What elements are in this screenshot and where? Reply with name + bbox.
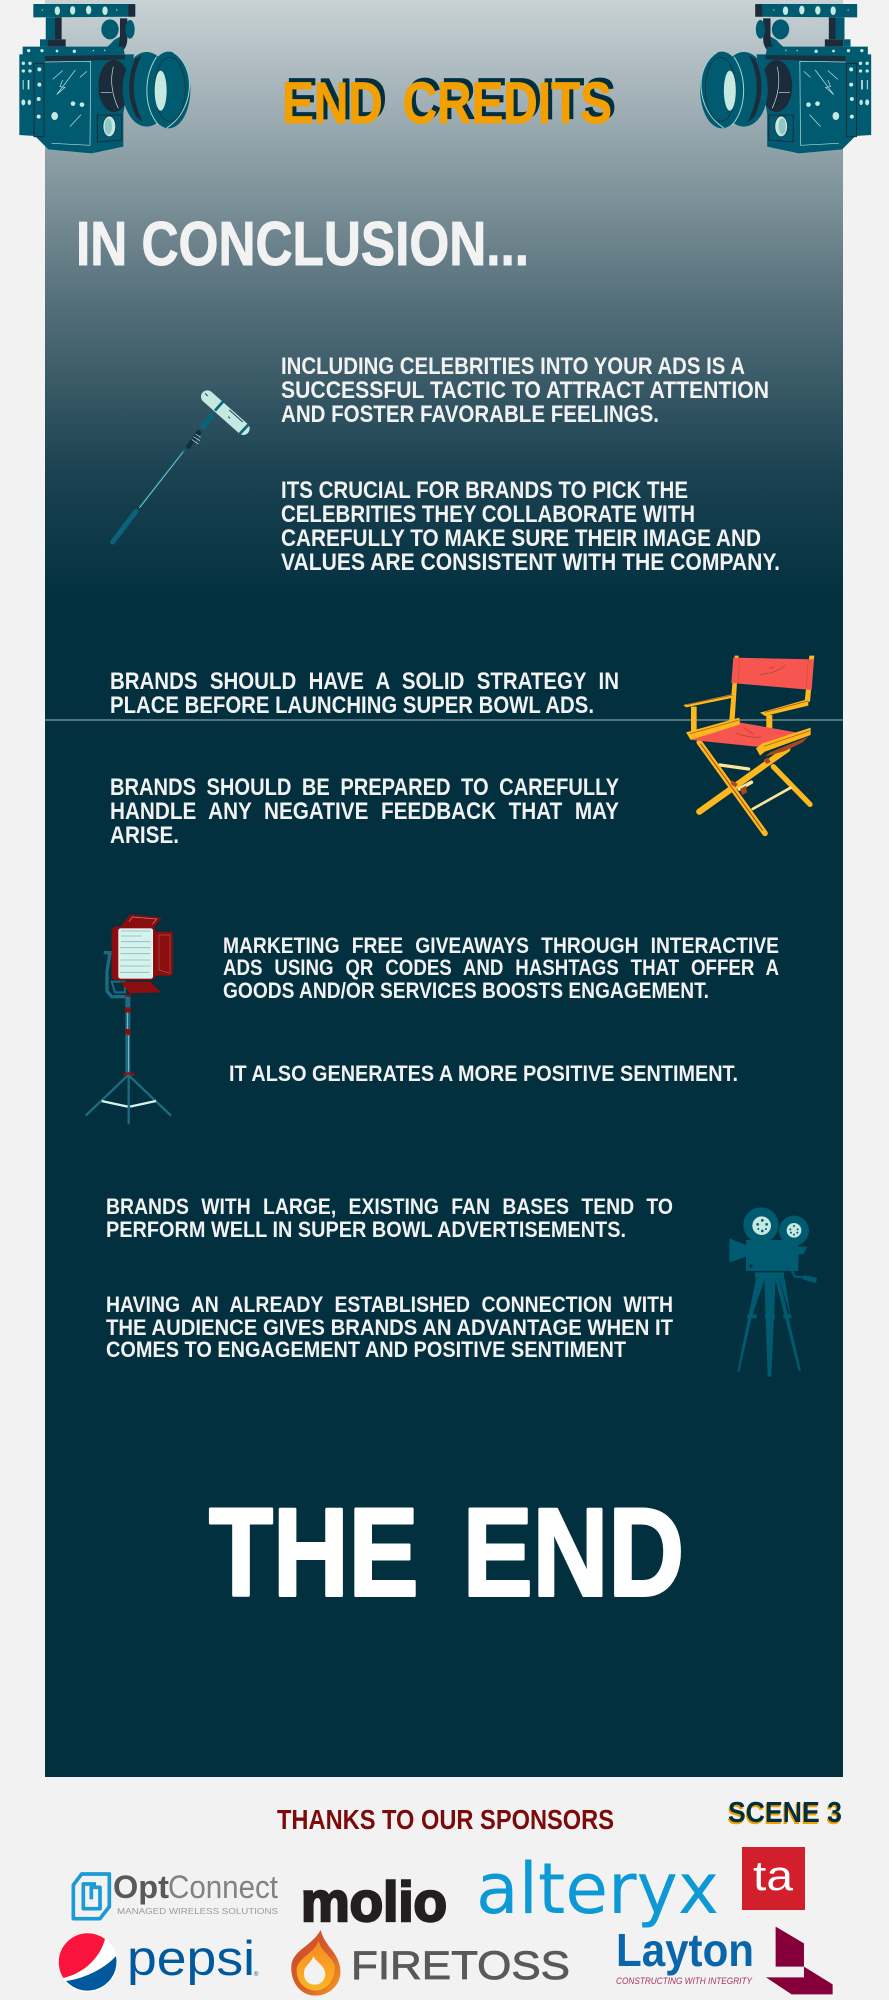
text: strategy takeaways: HANDLE ANY NEGATIVE FEEDBACK THAT MAY: [110, 798, 619, 825]
icon: director chair: [683, 656, 814, 833]
text: fan base takeaways: HAVING AN ALREADY ESTABLISHED CONNECTION WITH: [106, 1292, 673, 1317]
text: strategy takeaways: BRANDS SHOULD HAVE A SOLID STRATEGY IN: [110, 668, 619, 695]
label: scene 3: SCENE 3: [728, 1797, 842, 1829]
icon: right cinema camera: [700, 4, 871, 153]
text: celebrity takeaways: INCLUDING CELEBRITIES INTO YOUR ADS IS A: [281, 353, 745, 380]
icon: studio light on stand: [86, 914, 173, 1124]
icon: boom microphone: [113, 393, 248, 542]
text: strategy takeaways: BRANDS SHOULD BE PREPARED TO CAREFULLY: [110, 774, 619, 801]
logo: pepsi: pepsi: [127, 1932, 255, 1986]
title: end credits: END CREDITS: [282, 71, 612, 136]
logo: ta: [742, 1847, 805, 1910]
logo: optconnect: [73, 1869, 279, 1919]
logo: layton: Layton: [616, 1924, 754, 1976]
text: fan base takeaways: BRANDS WITH LARGE, EXISTING FAN BASES TEND TO: [106, 1194, 673, 1219]
heading: in conclusion: IN CONCLUSION...: [76, 210, 529, 279]
text: giveaway takeaways: IT ALSO GENERATES A MORE POSITIVE SENTIMENT.: [229, 1061, 738, 1086]
text: fan base takeaways: COMES TO ENGAGEMENT AND POSITIVE SENTIMENT: [106, 1337, 626, 1362]
logo: alteryx: alteryx: [476, 1848, 719, 1930]
heading: the end: THE END: [209, 1484, 684, 1622]
panel: main gradient background: [45, 0, 843, 1777]
logo: layton: CONSTRUCTING WITH INTEGRITY: [616, 1976, 753, 1987]
heading: thanks to our sponsors: THANKS TO OUR SPONSORS: [277, 1804, 614, 1835]
text: fan base takeaways: THE AUDIENCE GIVES BRANDS AN ADVANTAGE WHEN IT: [106, 1315, 673, 1340]
logo: optconnect: MANAGED WIRELESS SOLUTIONS: [117, 1906, 279, 1916]
text: celebrity takeaways: [281, 353, 780, 576]
logo: ta: ta: [753, 1852, 794, 1899]
title: end credits: END CREDITS: [286, 67, 616, 132]
text: strategy takeaways: [110, 668, 619, 849]
text: celebrity takeaways: ITS CRUCIAL FOR BRANDS TO PICK THE: [281, 477, 688, 504]
text: giveaway takeaways: GOODS AND/OR SERVICES BOOSTS ENGAGEMENT.: [223, 978, 709, 1003]
logo: firetoss: FIRETOSS: [351, 1944, 570, 1988]
logo: pepsi: ®: [254, 1971, 259, 1978]
logo: molio: molio: [301, 1870, 447, 1933]
text: fan base takeaways: [106, 1194, 673, 1362]
text: giveaway takeaways: ADS USING QR CODES AND HASHTAGS THAT OFFER A: [223, 955, 779, 980]
text: celebrity takeaways: AND FOSTER FAVORABLE FEELINGS.: [281, 401, 659, 428]
text: celebrity takeaways: SUCCESSFUL TACTIC TO ATTRACT ATTENTION: [281, 377, 769, 404]
logo: pepsi: [58, 1932, 259, 1992]
label: scene 3: SCENE 3: [727, 1799, 841, 1831]
text: celebrity takeaways: CELEBRITIES THEY COLLABORATE WITH: [281, 501, 695, 528]
text: fan base takeaways: PERFORM WELL IN SUPER BOWL ADVERTISEMENTS.: [106, 1217, 626, 1242]
text: celebrity takeaways: VALUES ARE CONSISTENT WITH THE COMPANY.: [281, 549, 780, 576]
icon: film camera on tripod: [729, 1207, 817, 1377]
logo: firetoss: [291, 1930, 570, 1996]
text: strategy takeaways: ARISE.: [110, 822, 179, 849]
logo: optconnect: Opt: [113, 1869, 169, 1905]
text: celebrity takeaways: CAREFULLY TO MAKE SURE THEIR IMAGE AND: [281, 525, 761, 552]
logo: layton: [616, 1924, 833, 1994]
logo: optconnect: Connect: [168, 1869, 278, 1905]
text: giveaway takeaways: MARKETING FREE GIVEAWAYS THROUGH INTERACTIVE: [223, 933, 779, 958]
text: giveaway takeaways: [223, 933, 779, 1086]
text: strategy takeaways: PLACE BEFORE LAUNCHING SUPER BOWL ADS.: [110, 692, 594, 719]
icon: left cinema camera: [19, 4, 190, 153]
